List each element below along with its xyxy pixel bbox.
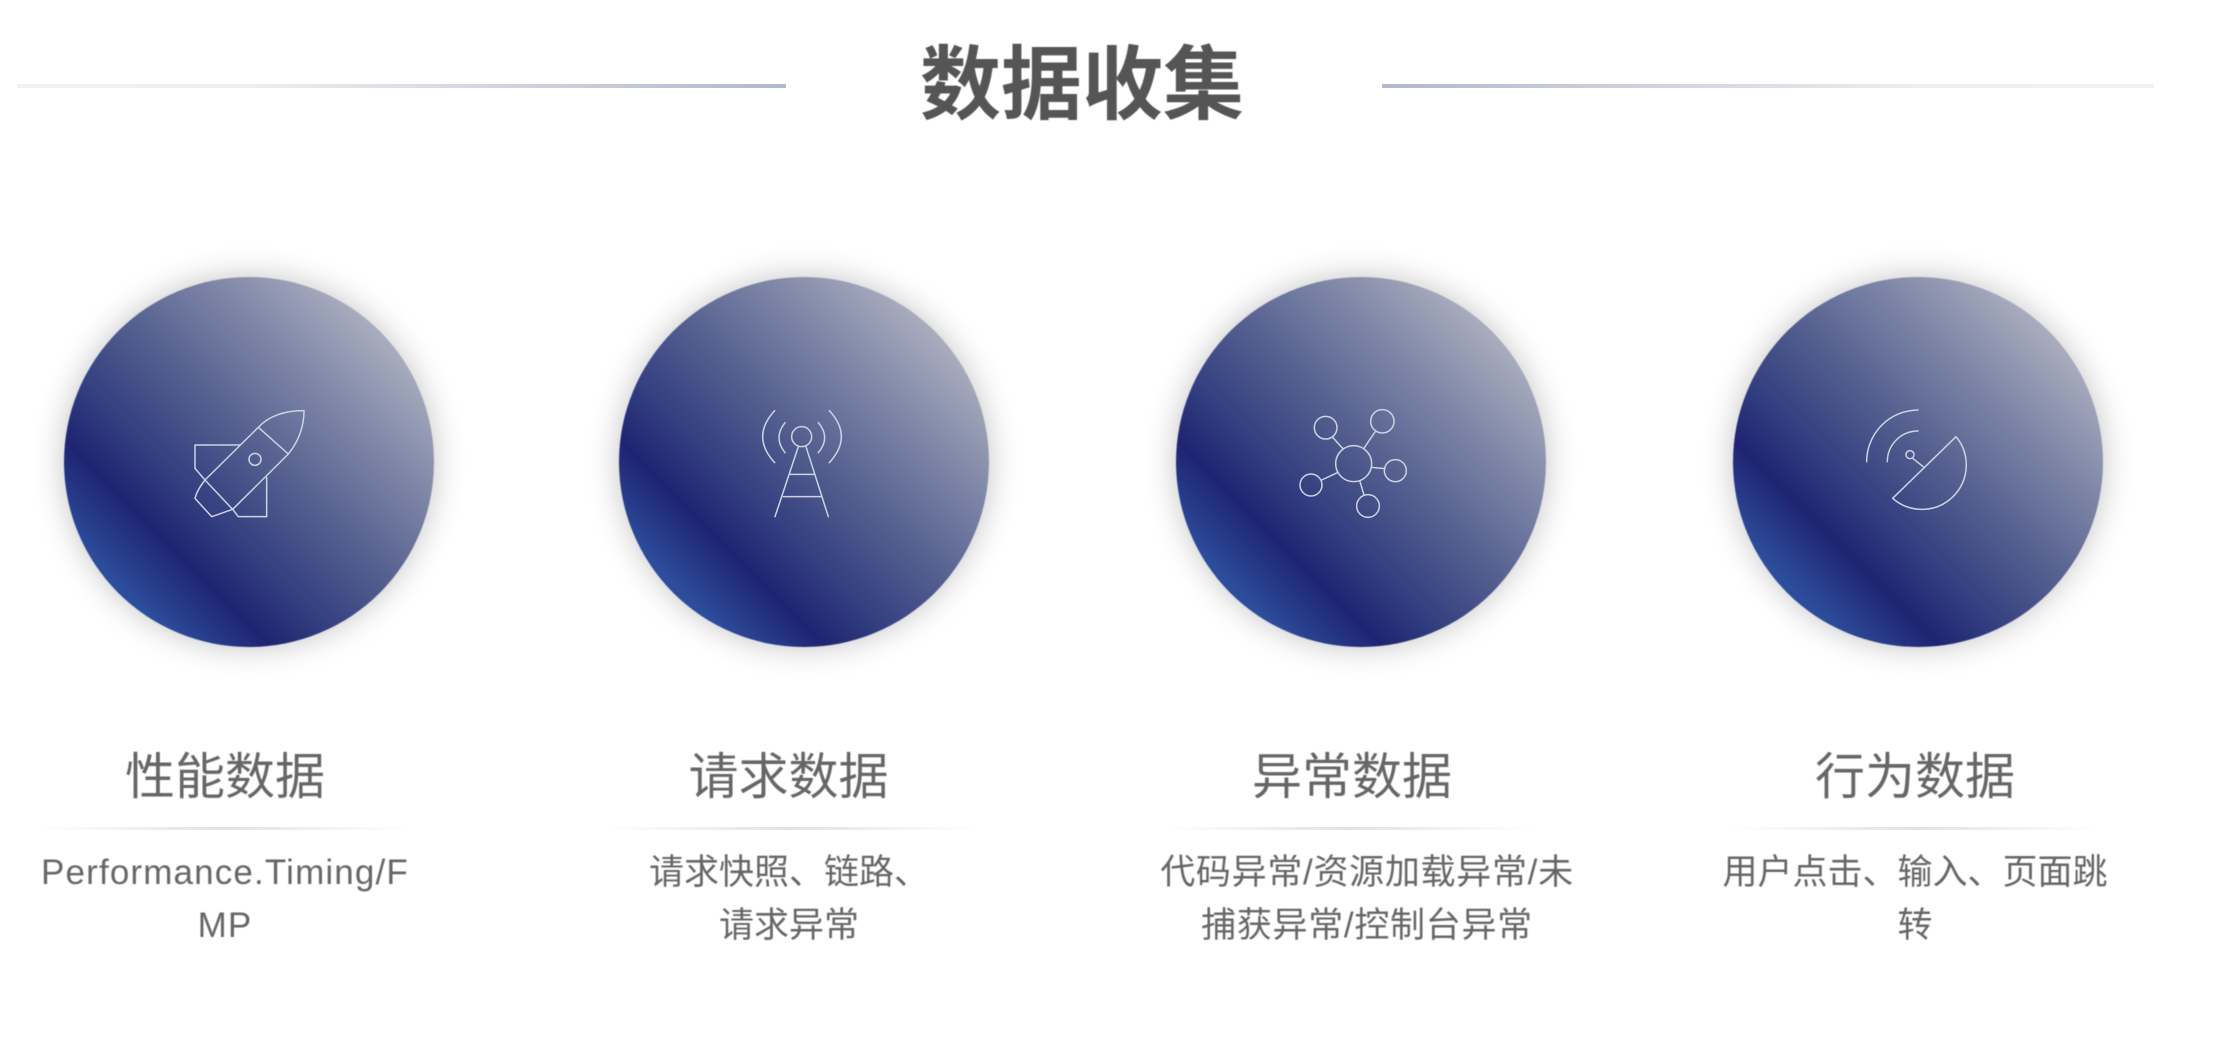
description: 代码异常/资源加载异常/未 bbox=[1160, 853, 1574, 892]
description: MP bbox=[198, 906, 252, 945]
heading: 异常数据 bbox=[1252, 737, 1452, 809]
heading: 请求数据 bbox=[688, 737, 888, 809]
icon: network nodes bbox=[1299, 408, 1408, 518]
description: 用户点击、输入、页面跳 bbox=[1722, 853, 2108, 892]
divider bbox=[1730, 827, 2100, 830]
description bbox=[649, 853, 929, 945]
title: 数据收集 bbox=[920, 20, 1244, 137]
panel: request data bbox=[603, 261, 1005, 945]
panel: behavior data bbox=[1717, 261, 2119, 945]
description: 转 bbox=[1897, 906, 1932, 945]
description: Performance.Timing/F bbox=[41, 853, 409, 892]
description: 请求异常 bbox=[719, 906, 859, 945]
circle background bbox=[1176, 277, 1546, 647]
title rule left bbox=[17, 84, 786, 88]
icon: antenna bbox=[762, 410, 842, 518]
title rule right bbox=[1382, 84, 2154, 88]
divider bbox=[605, 827, 976, 830]
icon: radar dish bbox=[1866, 409, 1967, 510]
description: 捕获异常/控制台异常 bbox=[1201, 906, 1533, 945]
panel: exception data bbox=[1160, 261, 1574, 945]
panel: performance data bbox=[41, 261, 450, 945]
circle background bbox=[619, 277, 989, 647]
heading: 行为数据 bbox=[1815, 737, 2015, 809]
divider bbox=[41, 827, 408, 830]
circle background bbox=[64, 277, 434, 647]
description bbox=[41, 853, 409, 945]
description bbox=[1160, 853, 1574, 945]
circle background bbox=[1733, 277, 2103, 647]
description bbox=[1722, 853, 2108, 945]
icon: rocket bbox=[194, 410, 305, 518]
heading: 性能数据 bbox=[125, 737, 325, 809]
divider bbox=[1164, 827, 1534, 830]
description: 请求快照、链路、 bbox=[649, 853, 929, 892]
